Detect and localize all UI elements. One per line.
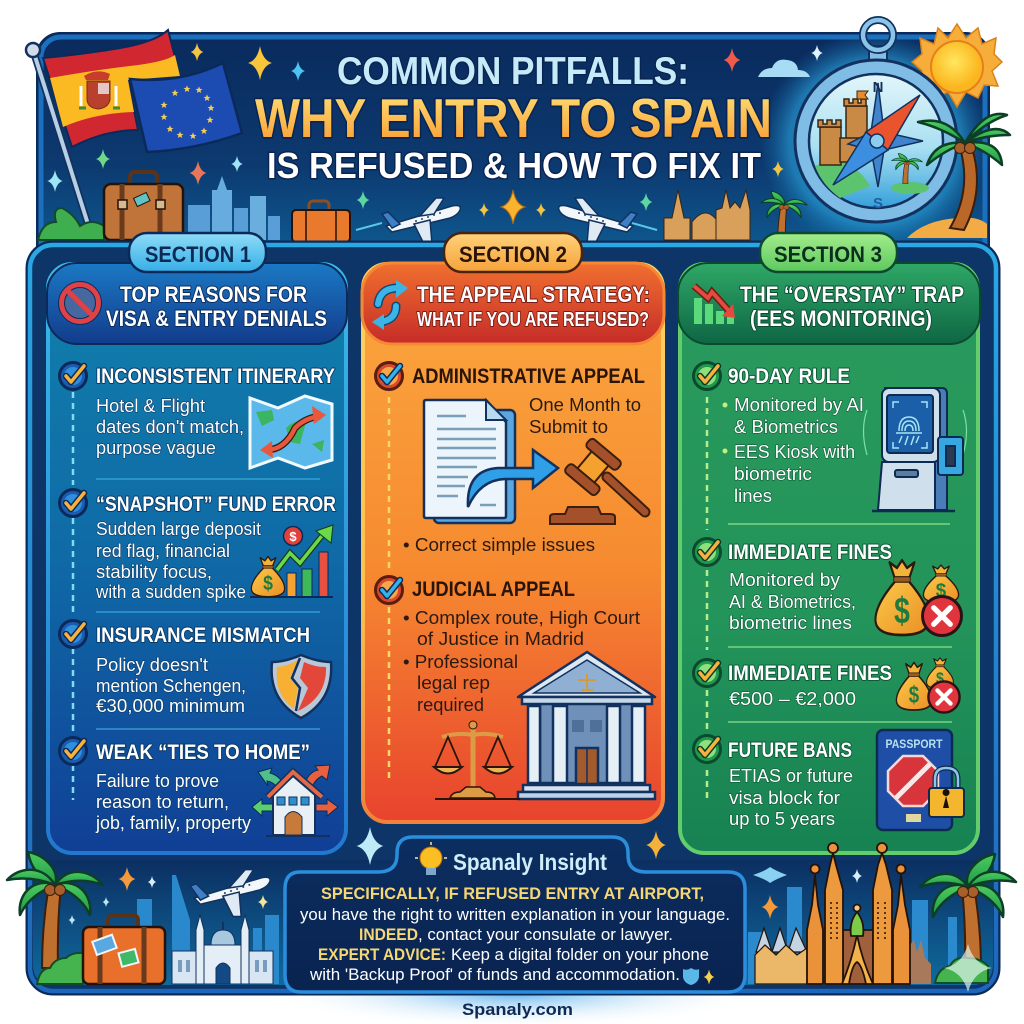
section 2 card (363, 264, 663, 822)
section 1 header text: TOP REASONS FOR (120, 282, 307, 307)
insight sparkles (357, 827, 666, 865)
bottom right stars (753, 867, 992, 992)
item: administrative appeal (376, 362, 645, 437)
bottom left scene (7, 852, 279, 984)
bottom orange suitcase (83, 915, 165, 984)
sun (912, 24, 1002, 107)
panel: section 1 (47, 263, 347, 853)
section 1 header text: VISA & ENTRY DENIALS (106, 306, 327, 331)
bottom band background (33, 860, 993, 985)
section 3 pill: SECTION 3 (774, 242, 882, 267)
insight text: Keep a digital folder on your phone (451, 945, 709, 964)
icon: document (424, 400, 515, 523)
decorative sparkle stars (47, 43, 823, 217)
item: weak ties to home: reason to return, (96, 791, 229, 812)
icon: map (250, 396, 332, 468)
insight box (285, 837, 745, 992)
item: insurance mismatch: Policy doesn't (96, 654, 208, 675)
section 3 header text: THE “OVERSTAY” TRAP (740, 282, 964, 307)
skyline right (748, 887, 957, 984)
section 2 header text: WHAT IF YOU ARE REFUSED? (417, 309, 649, 331)
section 3 pill (760, 233, 897, 272)
compass: N (873, 79, 883, 96)
section 1 header (47, 263, 347, 344)
item: judicial appeal: • Complex route, High Court (403, 607, 640, 628)
section 1 timeline (72, 392, 74, 800)
flight trails (356, 223, 657, 230)
title: IS REFUSED & HOW TO FIX IT (267, 145, 761, 186)
icon: shield and sparkle (683, 968, 714, 985)
item: future bans (694, 736, 853, 829)
footer website: Spanaly.com (462, 1000, 573, 1019)
item: administrative appeal: One Month to (529, 394, 641, 415)
section 1 header text (106, 282, 327, 331)
plane left (382, 198, 460, 244)
item: snapshot fund error: red flag, financial (96, 540, 230, 561)
item: weak ties to home: Failure to prove (96, 770, 219, 791)
item: administrative appeal: Submit to (529, 416, 608, 437)
insight text: EXPERT ADVICE: (318, 945, 446, 964)
item: inconsistent itinerary: INCONSISTENT ITINERARY (96, 365, 335, 388)
section 3 header text (740, 282, 964, 331)
icon: money bag chart (250, 525, 333, 597)
section 3 header (678, 263, 980, 344)
right brown spires (910, 940, 931, 984)
item: immediate fines 1: biometric lines (729, 612, 852, 633)
small palm (761, 191, 807, 240)
insight heading: Spanaly Insight (453, 849, 607, 875)
item: immediate fines 2: IMMEDIATE FINES (728, 662, 892, 685)
footer glow (265, 960, 765, 1024)
item: judicial appeal: legal rep (417, 672, 490, 693)
icon: passport with stop sign and lock (877, 730, 964, 830)
item: 90-day rule: EES Kiosk with (734, 441, 855, 462)
small cathedral wing (755, 928, 807, 984)
item: judicial appeal: JUDICIAL APPEAL (412, 578, 575, 601)
insight text: you have the right to written explanation in your language. (300, 905, 730, 924)
left skyline (188, 176, 280, 240)
bottom skyline left (137, 875, 279, 984)
bottom plane (190, 870, 270, 917)
icon: broken shield (272, 655, 331, 718)
bush right (935, 958, 988, 983)
section 3 card (680, 264, 978, 853)
bottom palace (172, 915, 273, 984)
main section frame (29, 244, 997, 992)
item: immediate fines 2: €500 – €2,000 (729, 688, 856, 709)
section 1 dividers (96, 479, 320, 729)
bottom left stars (68, 867, 268, 925)
panel: section 2 (362, 263, 664, 822)
header frame band (41, 37, 985, 277)
insight text: INDEED (359, 925, 418, 944)
section 1 pill (129, 233, 266, 272)
item: 90-day rule: Monitored by AI (734, 394, 864, 415)
icon: scales of justice (434, 721, 520, 799)
bottom right scene (748, 843, 1016, 992)
compass (795, 20, 957, 222)
item: snapshot fund error: “SNAPSHOT” FUND ERROR (96, 493, 336, 516)
item: weak ties to home: WEAK “TIES TO HOME” (96, 741, 310, 764)
icon: light bulb (415, 842, 447, 875)
insight text (300, 884, 730, 984)
panel: section 3 (678, 263, 980, 853)
section 1 pill: SECTION 1 (145, 242, 251, 267)
Spanish flag (43, 30, 180, 147)
section 3 dividers (728, 524, 952, 722)
item: immediate fines 1: IMMEDIATE FINES (728, 541, 892, 564)
Spanish landmark skyline (664, 190, 750, 240)
item: judicial appeal: of Justice in Madrid (417, 628, 584, 649)
compass: S (873, 195, 883, 212)
green bush left (38, 208, 104, 240)
EU flag (130, 63, 242, 152)
icon: gavel (550, 437, 645, 524)
icon: courthouse (518, 652, 655, 799)
insight text: , contact your consulate or lawyer. (418, 925, 673, 944)
item: weak ties to home (60, 738, 310, 833)
item: 90-day rule: 90-DAY RULE (728, 365, 850, 388)
palm tree right (920, 854, 1016, 970)
section 3 header text: (EES MONITORING) (750, 306, 932, 331)
icon: house with arrows (252, 765, 338, 836)
insight text: SPECIFICALLY, IF REFUSED ENTRY AT AIRPORT, (321, 884, 704, 903)
brown suitcase (104, 172, 183, 240)
section 1 card (48, 264, 346, 853)
gold star (501, 190, 525, 224)
item: inconsistent itinerary: purpose vague (96, 437, 216, 458)
item: immediate fines 1: Monitored by (729, 569, 841, 590)
item: administrative appeal: ADMINISTRATIVE APPEAL (412, 365, 645, 388)
title (255, 50, 772, 186)
title: COMMON PITFALLS: (337, 50, 689, 93)
flag pole (26, 43, 93, 240)
section 3 timeline (706, 397, 708, 800)
icon: money bag chart: $ (289, 529, 297, 544)
item: immediate fines 2 (694, 660, 892, 709)
item: judicial appeal (376, 576, 640, 715)
item: insurance mismatch (60, 620, 310, 716)
item: insurance mismatch: INSURANCE MISMATCH (96, 624, 310, 647)
item: judicial appeal: • Professional (403, 651, 518, 672)
main frame band (30, 245, 996, 991)
plane right (559, 198, 637, 244)
item: 90-day rule (694, 362, 864, 506)
bottom left bush (37, 953, 83, 984)
item: 90-day rule: biometric (734, 463, 812, 484)
item: future bans: FUTURE BANS (728, 739, 852, 762)
item: insurance mismatch: mention Schengen, (96, 675, 246, 696)
item: insurance mismatch: €30,000 minimum (96, 695, 245, 716)
section 2 timeline (388, 397, 390, 780)
item: immediate fines 1: AI & Biometrics, (729, 591, 856, 612)
Sagrada Familia (807, 843, 910, 984)
section 2 pill (444, 233, 582, 272)
item: inconsistent itinerary (60, 362, 335, 458)
item: snapshot fund error: stability focus, (96, 561, 212, 582)
item: snapshot fund error: Sudden large deposit (96, 518, 261, 539)
item: 90-day rule: & Biometrics (734, 416, 838, 437)
insight text: with 'Backup Proof' of funds and accommodation. (309, 965, 680, 984)
section 2 header text (417, 282, 650, 331)
icon: passport with stop sign and lock: PASSPORT (886, 739, 942, 751)
section 2 header (362, 263, 664, 344)
section 2 pill: SECTION 2 (459, 242, 567, 267)
item: future bans: visa block for (729, 787, 840, 808)
item: inconsistent itinerary: Hotel & Flight (96, 395, 205, 416)
item: future bans: up to 5 years (729, 808, 835, 829)
orange suitcase (292, 201, 350, 242)
cloud (758, 60, 810, 77)
item: future bans: ETIAS or future (729, 765, 853, 786)
section 2 header text: THE APPEAL STRATEGY: (417, 282, 650, 307)
item: immediate fines 1 (694, 538, 892, 633)
title: WHY ENTRY TO SPAIN (255, 87, 772, 149)
flag coat of arms (79, 71, 120, 109)
arrow: document to gavel (468, 450, 558, 507)
icon: falling chart (694, 286, 735, 324)
header panel background (38, 34, 988, 274)
icon: money bags with X (875, 560, 962, 636)
panel: Spanaly Insight (285, 837, 745, 992)
compass glow (760, 30, 990, 254)
icon: small money bags with X (896, 658, 960, 713)
item: 90-day rule: lines (734, 485, 772, 506)
item: inconsistent itinerary: dates don't match, (96, 416, 244, 437)
item: judicial appeal: required (417, 694, 484, 715)
text: correct simple issues: • Correct simple issues (403, 534, 595, 555)
item: snapshot fund error (60, 490, 336, 602)
palm tree left (7, 852, 103, 968)
icon: refresh arrows (372, 280, 408, 330)
icon: EES kiosk (864, 388, 966, 511)
item: snapshot fund error: with a sudden spike (95, 581, 246, 602)
item: weak ties to home: job, family, property (95, 812, 252, 833)
island and palm tree (907, 114, 1010, 238)
icon: prohibition sign (62, 284, 98, 322)
